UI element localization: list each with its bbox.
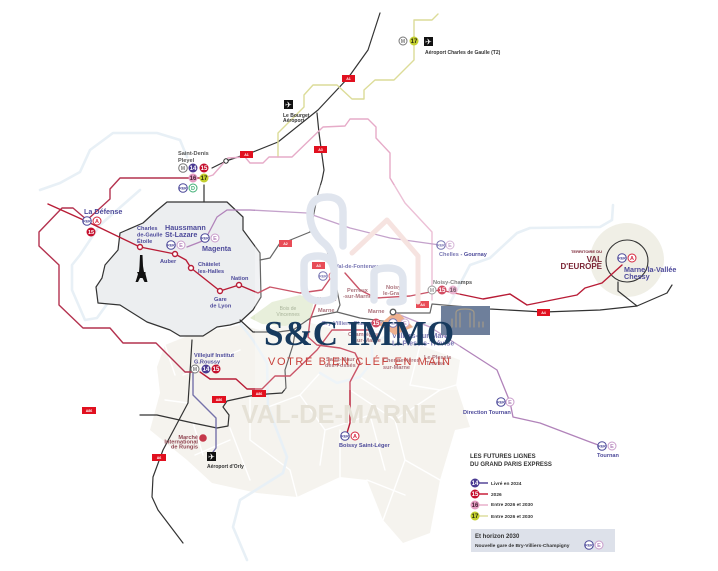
Charles de Gaulle airport: Aéroport Charles de Gaulle (T2) xyxy=(425,50,501,56)
map: rivers xyxy=(40,133,613,560)
central station labels: Le Plessis xyxy=(424,355,451,361)
Saint-Denis Pleyel xyxy=(178,151,209,192)
Marne-la-Vallée Chessy: D'EUROPE xyxy=(561,262,603,271)
Charles de Gaulle airport: 17 xyxy=(411,39,418,45)
line 17 xyxy=(278,14,438,157)
Direction Tournan: E xyxy=(508,400,512,406)
Bry-Villiers station: E xyxy=(403,321,407,327)
legend item 16: 16 xyxy=(472,503,479,509)
Tournan: Tournan xyxy=(597,453,620,459)
watermark wash xyxy=(255,185,460,390)
central station labels xyxy=(317,264,454,371)
legend title: DU GRAND PARIS EXPRESS xyxy=(470,462,552,468)
Paris labels xyxy=(84,207,249,310)
Charles de Gaulle airport: ✈ xyxy=(425,38,432,46)
icon: Eiffel tower xyxy=(136,255,148,282)
legend box horizon 2030: E xyxy=(597,543,601,549)
Marne-la-Vallée Chessy: RER xyxy=(618,256,626,260)
Villejuif: 14 xyxy=(203,367,210,373)
motorway signs: A4 xyxy=(420,303,425,307)
Le Bourget airport: Aéroport xyxy=(283,118,304,124)
Boissy Saint-Léger: Boissy Saint-Léger xyxy=(339,443,390,449)
Saint-Denis Pleyel: Pleyel xyxy=(178,158,195,164)
RER E xyxy=(187,210,440,247)
Val-de-Fontenay badges: A xyxy=(331,274,335,280)
map: Val-de-Marne territory xyxy=(150,320,470,543)
Direction Tournan: RER xyxy=(497,400,505,404)
Marne-la-Vallée Chessy: Marne-la-Vallée xyxy=(624,265,676,274)
Paris labels: Magenta xyxy=(202,244,232,253)
legend item 14: Livré en 2024 xyxy=(491,481,522,487)
legend title xyxy=(470,454,552,468)
Villejuif: 15 xyxy=(213,367,220,373)
legend item 17: 17 xyxy=(472,514,479,520)
badges Haussmann and Magenta: E xyxy=(179,243,183,249)
RER E east xyxy=(395,313,601,446)
map: Val d'Europe halo xyxy=(590,223,664,297)
Orly airport: ✈ xyxy=(208,452,215,462)
Marne-la-Vallée Chessy: TERRITOIRE DU xyxy=(571,249,602,254)
Paris labels: La Défense xyxy=(84,207,122,216)
legend box horizon 2030: RER xyxy=(585,544,593,548)
Boissy Saint-Léger xyxy=(339,432,390,449)
Paris labels: Auber xyxy=(160,259,177,265)
central station labels: Marne xyxy=(368,309,384,315)
logo: S&C IMMO: S&C IMMO xyxy=(264,314,454,353)
motorway signs: A6 xyxy=(157,456,161,460)
Charles de Gaulle airport xyxy=(399,36,501,56)
central station labels: Saint-Maur xyxy=(326,357,356,363)
Bry-Villiers station xyxy=(372,309,413,335)
Direction Tournan xyxy=(463,398,514,416)
motorway signs: A1 xyxy=(346,77,351,81)
central station labels: Perreux xyxy=(347,288,369,294)
Paris labels: de Lyon xyxy=(210,304,232,310)
Saint-Denis Pleyel: 15 xyxy=(201,166,208,172)
legend item 15 xyxy=(470,490,502,498)
central station labels: Val-de-Fontenay xyxy=(335,264,379,270)
Marne-la-Vallée Chessy xyxy=(561,249,676,281)
badges La Défense: RER xyxy=(83,220,91,224)
logo tagline: VOTRE BIEN CLÉF EN MAIN xyxy=(268,355,450,368)
badges Haussmann and Magenta: RER xyxy=(201,236,209,240)
Villejuif: G.Roussy xyxy=(194,360,221,366)
legend item 15: 15 xyxy=(472,492,479,498)
Noisy-Champs: Noisy-Champs xyxy=(433,280,472,286)
central station labels: le-Grand xyxy=(383,291,407,297)
Saint-Denis Pleyel: D xyxy=(191,186,195,192)
legend box horizon 2030: Et horizon 2030 xyxy=(475,534,520,540)
Saint-Denis Pleyel: 16 xyxy=(190,176,197,182)
Tournan: RER xyxy=(598,444,606,448)
legend item 16 xyxy=(470,500,533,510)
Direction Tournan: Direction Tournan xyxy=(463,410,511,416)
Saint-Denis Pleyel: RER xyxy=(179,186,187,190)
central station labels: Champigny xyxy=(348,332,379,338)
motorway signs: A4 xyxy=(541,311,546,315)
legend box horizon 2030 xyxy=(471,529,615,552)
Chelles - Gournay: RER xyxy=(437,244,445,248)
central station labels: Chennevières xyxy=(383,358,420,364)
Marché de Rungis xyxy=(164,434,207,450)
Marne-la-Vallée Chessy: VAL xyxy=(587,255,602,264)
central station labels: Nogent xyxy=(317,297,336,303)
motorway signs: A86 xyxy=(216,398,222,402)
legend xyxy=(470,454,615,552)
RER A and line 15 xyxy=(48,204,622,433)
line 14 Orly xyxy=(193,373,216,452)
Orly airport xyxy=(207,452,244,470)
badges La Défense: A xyxy=(95,219,99,225)
Paris labels: les-Halles xyxy=(198,269,224,275)
legend title: LES FUTURES LIGNES xyxy=(470,454,536,460)
Le Bourget airport: Le Bourget xyxy=(283,113,310,119)
central station labels: sur-Marne xyxy=(383,365,410,371)
Chelles - Gournay: Chelles - Gournay xyxy=(439,252,488,258)
central station labels: Bry-Villiers-Champigny xyxy=(322,321,385,327)
watermark logo xyxy=(304,197,418,302)
legend item 14 xyxy=(470,478,522,488)
Marché de Rungis: International xyxy=(164,440,198,446)
map: Bois de Vincennes: Vincennes xyxy=(276,312,300,318)
central station labels: -sur-Marne xyxy=(352,338,381,344)
badges Haussmann and Magenta: RER xyxy=(167,244,175,248)
Paris labels: St-Lazare xyxy=(165,230,197,239)
line 16 east xyxy=(204,119,432,300)
Paris labels: de-Gaulle xyxy=(137,232,162,238)
central station labels: des-Fossés xyxy=(325,363,356,369)
Boissy Saint-Léger: RER xyxy=(341,434,349,438)
Saint-Denis Pleyel: 17 xyxy=(201,176,208,182)
Marne-la-Vallée Chessy: Chessy xyxy=(624,272,650,281)
central station labels: Trévise xyxy=(426,361,445,367)
Le Bourget airport: ✈ xyxy=(285,100,292,110)
Marché de Rungis: de Rungis xyxy=(171,444,198,450)
legend box horizon 2030: Nouvelle gare de Bry-Villiers-Champigny xyxy=(475,543,570,549)
legend item 16: Entre 2026 et 2030 xyxy=(491,502,533,508)
Bry-Villiers station: 15 xyxy=(373,321,380,327)
Paris labels: Nation xyxy=(231,276,249,282)
Paris labels: Haussmann xyxy=(165,223,206,232)
legend item 17 xyxy=(470,512,533,520)
map: circle around Marne-la-Vallée xyxy=(606,240,648,282)
Tournan xyxy=(597,442,620,459)
Chelles - Gournay: E xyxy=(448,243,452,249)
badges La Défense: 15 xyxy=(88,230,94,236)
Val-de-Fontenay badges xyxy=(319,272,337,280)
badges Haussmann and Magenta xyxy=(167,234,219,249)
Chelles - Gournay xyxy=(437,241,488,258)
central station labels: Noisy xyxy=(386,285,402,291)
Noisy-Champs: 16 xyxy=(450,288,457,294)
legend item 17: Entre 2026 et 2030 xyxy=(491,514,533,520)
logo panel grey-blue xyxy=(441,306,490,335)
Boissy Saint-Léger: A xyxy=(353,434,357,440)
Le Bourget airport xyxy=(283,100,310,124)
Saint-Denis Pleyel: 14 xyxy=(190,166,197,172)
legend item 14: 14 xyxy=(472,481,479,487)
central station labels: -sur-Marne xyxy=(343,294,372,300)
motorway signs: A1 xyxy=(244,153,249,157)
legend item 15: 2026 xyxy=(491,492,502,498)
Paris stations xyxy=(138,244,242,294)
Val-de-Marne label: VAL-DE-MARNE xyxy=(241,401,437,429)
badges La Défense xyxy=(83,217,101,236)
Charles de Gaulle airport: M xyxy=(401,39,405,45)
Tournan: E xyxy=(610,444,614,450)
map: motorways xyxy=(140,13,672,543)
Villejuif: M xyxy=(193,367,197,373)
motorway signs: A3 xyxy=(318,148,323,152)
map: Paris xyxy=(96,202,261,336)
central station labels: Le Plessis-Trévise xyxy=(392,338,454,348)
Marché de Rungis: Marché xyxy=(178,435,198,441)
central station labels: Villiers-sur-Marne xyxy=(392,331,453,340)
motorway signs: A86 xyxy=(256,392,262,396)
motorway signs: A3 xyxy=(316,264,321,268)
white station marker xyxy=(224,159,228,163)
line 16 and 15 west xyxy=(39,178,204,372)
Marne-la-Vallée Chessy: A xyxy=(630,256,634,262)
Noisy-Champs: M xyxy=(430,288,434,294)
map: Bois de Vincennes: Bois de xyxy=(280,306,297,312)
Saint-Denis Pleyel: Saint-Denis xyxy=(178,151,209,157)
badges Haussmann and Magenta: E xyxy=(213,236,217,242)
Villejuif: Villejuif Institut xyxy=(194,353,234,359)
motorway signs: A86 xyxy=(86,409,92,413)
motorway signs: A2 xyxy=(283,242,288,246)
Noisy-Champs: 15 xyxy=(439,288,446,294)
map: Bois de Vincennes xyxy=(250,295,314,326)
Paris labels: Charles xyxy=(137,226,158,232)
Orly airport: Aéroport d'Orly xyxy=(207,464,244,470)
central station labels: Marne xyxy=(318,308,334,314)
Paris labels: Châtelet xyxy=(198,262,220,268)
motorway signs xyxy=(82,75,550,461)
Paris labels: Étoile xyxy=(137,237,152,245)
Saint-Denis Pleyel: M xyxy=(181,166,185,172)
Paris labels: Gare xyxy=(214,297,227,303)
Noisy-Champs xyxy=(428,280,472,294)
Villejuif xyxy=(191,353,234,374)
Bry-Villiers station: RER xyxy=(389,322,397,326)
Val-de-Fontenay badges: RER xyxy=(319,274,327,278)
